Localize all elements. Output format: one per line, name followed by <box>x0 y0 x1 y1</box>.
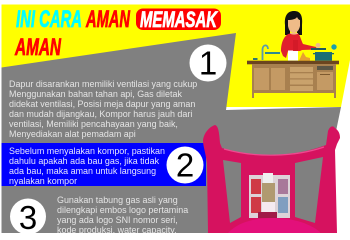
yellow background <box>2 4 350 110</box>
icon: cooking pot <box>311 44 337 61</box>
worktop <box>247 61 339 64</box>
text block 1: ventilasi, Memiliki pencahayaan yang baik, <box>9 119 178 129</box>
title: AMAN <box>85 6 130 33</box>
text block 1: didekat ventilasi, Posisi meja dapur yang aman <box>9 99 195 109</box>
kitchen illustration <box>247 11 339 98</box>
text block 1: dan mudah dijangkau, Kompor harus jauh dari <box>9 109 192 119</box>
text block 3: dilengkapi embos logo pertamina <box>57 205 188 215</box>
title: INI CARA <box>16 6 82 33</box>
circle 2: 2 <box>176 146 194 184</box>
circle 1 <box>190 44 226 82</box>
text block 3: yang ada logo SNI nomor seri, <box>57 215 178 225</box>
gas cylinder <box>203 125 340 233</box>
cylinder shoulder <box>228 218 320 233</box>
title: AMAN <box>14 34 61 61</box>
handle highlight <box>224 147 324 155</box>
text block 2: Sebelum menyalakan kompor, pastikan <box>9 146 165 156</box>
text block 1: Menggunakan bahan tahan api, Gas diletak <box>9 89 182 99</box>
cylinder valve <box>258 173 277 218</box>
text block 1: Dapur disarankan memiliki ventilasi yang cukup <box>9 79 197 89</box>
text block 1: Menyediakan alat pemadam api <box>9 129 136 139</box>
cabinet <box>252 64 336 98</box>
sink <box>265 52 280 54</box>
text block 3: Gunakan tabung gas asli yang <box>57 195 178 205</box>
blue band <box>2 143 206 186</box>
icon: faucet <box>262 45 268 60</box>
circle 2 <box>166 146 204 184</box>
title <box>14 6 221 61</box>
text block 2: nyalakan kompor <box>9 176 77 186</box>
icon: frying food <box>299 52 310 61</box>
text block 2: ada bau, maka aman untuk langsung <box>9 166 156 176</box>
title: MEMASAK <box>140 7 218 32</box>
cylinder collar <box>203 125 340 233</box>
circle 1: 1 <box>199 44 217 82</box>
right window <box>295 157 323 223</box>
text block 2: dahulu apakah ada bau gas, jika tidak <box>9 156 160 166</box>
left window <box>223 160 241 223</box>
cylinder label <box>249 175 290 218</box>
icon: woman cook <box>281 11 320 60</box>
circle 3 <box>10 198 46 236</box>
